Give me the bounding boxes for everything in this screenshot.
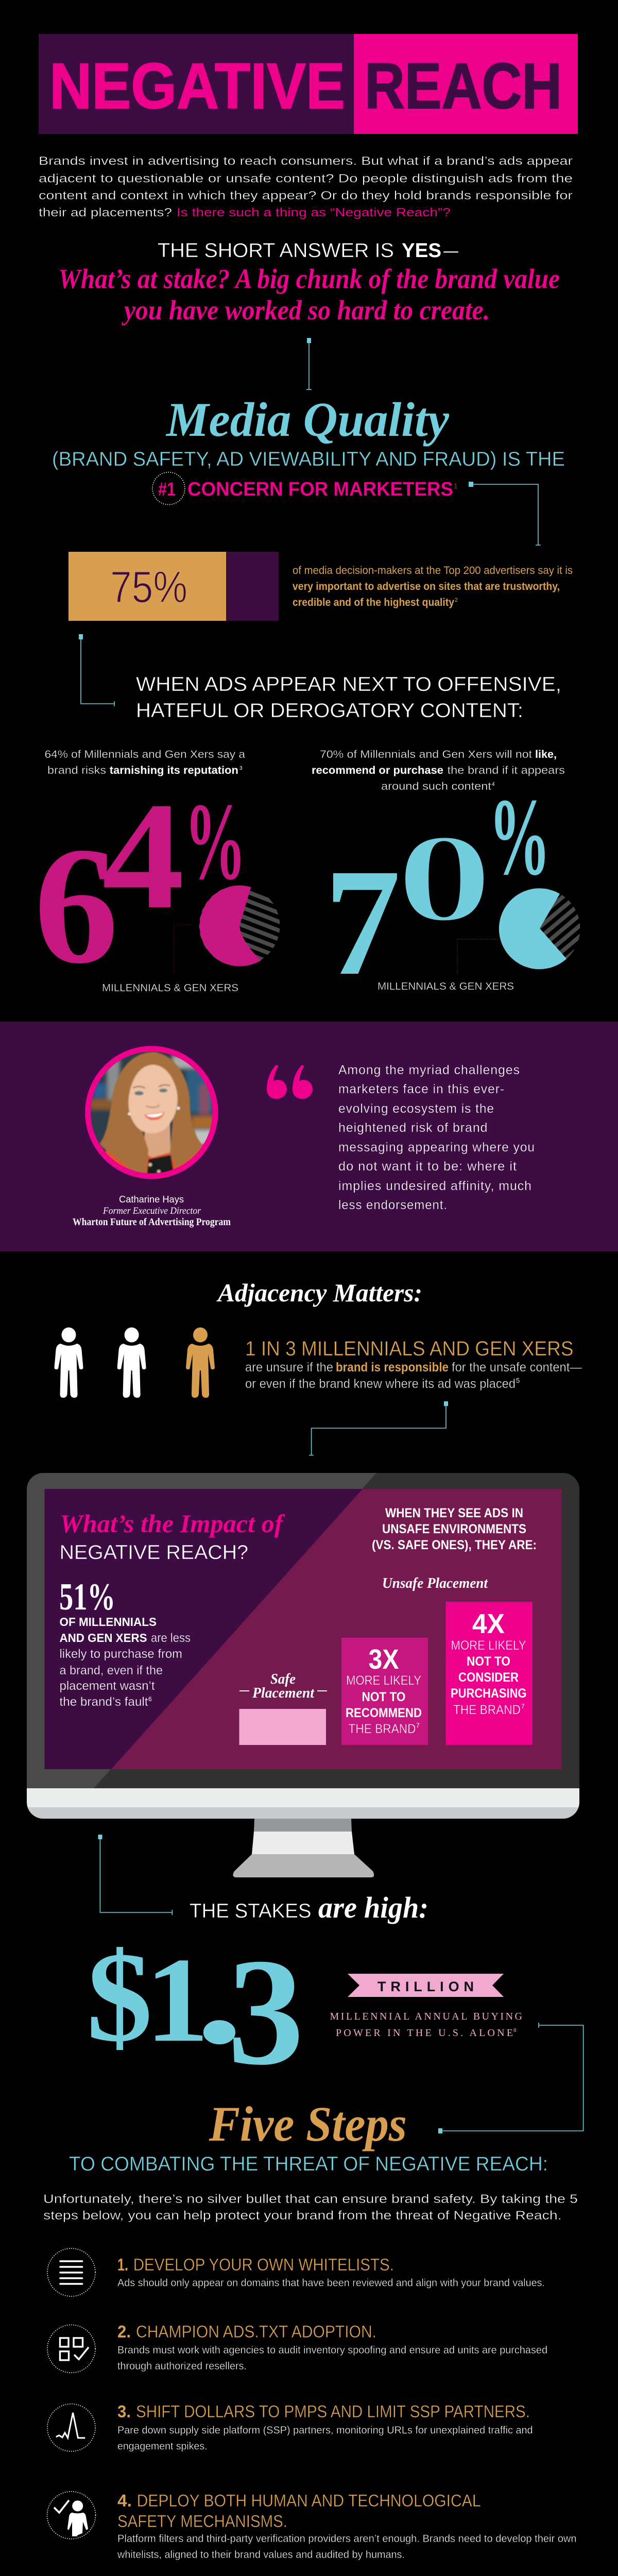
step 2: CHAMPION ADS.TXT ADOPTION.: [136, 2322, 376, 2341]
safe placement label and bar: [239, 1671, 327, 1745]
unsafe environments heading: [372, 1506, 537, 1552]
unsafe environments heading: (VS. SAFE ONES), THEY ARE:: [372, 1538, 537, 1552]
big number 64 percent: [34, 771, 246, 998]
bar 3X: NOT TO: [362, 1690, 406, 1704]
51 percent stat: placement wasn’t: [60, 1679, 155, 1693]
intro paragraph: Brands invest in advertising to reach consumers. But what if a brand’s ads appear: [39, 154, 573, 167]
quote text: [338, 1063, 535, 1212]
quote text: evolving ecosystem is the: [338, 1101, 494, 1116]
panel: quote Catharine Hays: [0, 1022, 618, 1251]
short answer heading: THE SHORT ANSWER IS: [158, 240, 394, 262]
pink stake statement: What’s at stake? A big chunk of the brand value: [58, 263, 560, 294]
bar 3X: MORE LIKELY: [346, 1673, 421, 1688]
icon: checklist: [47, 2325, 95, 2373]
quote text: do not want it to be: where it: [338, 1159, 517, 1174]
75 percent description: of media decision-makers at the Top 200 advertisers say it is: [293, 564, 573, 577]
intro paragraph: content and context in which they appear? Or do they hold brands responsible for: [39, 189, 573, 202]
buying power text: [330, 2011, 522, 2039]
number one concern: 1: [454, 482, 458, 490]
safe placement label and bar: Safe: [270, 1671, 296, 1687]
step 3: 3.: [117, 2402, 131, 2421]
offensive content heading: HATEFUL OR DEROGATORY CONTENT:: [136, 700, 523, 722]
monitor screen: [44, 1489, 561, 1769]
icon: list: [47, 2248, 95, 2296]
70 percent text: 70% of Millennials and Gen Xers will not: [320, 749, 532, 760]
number one concern: [152, 472, 458, 505]
51 percent stat: are less: [151, 1631, 191, 1645]
impact heading: What’s the Impact of: [60, 1509, 285, 1538]
51 percent stat: a brand, even if the: [60, 1664, 163, 1677]
quote mark: [267, 1065, 313, 1099]
big number 70 percent: 0: [396, 808, 493, 948]
pie chart 64 percent: [174, 885, 280, 974]
one in three text: brand is responsible: [336, 1360, 449, 1375]
icon: spike chart: [47, 2404, 95, 2451]
connector arrow 4: [309, 1401, 448, 1455]
attribution: Wharton Future of Advertising Program: [73, 1216, 231, 1228]
one in three text: [245, 1337, 582, 1391]
one in three text: for the unsafe content—: [452, 1360, 582, 1375]
connector arrow 5: [98, 1835, 172, 1915]
step 3: engagement spikes.: [117, 2441, 207, 2452]
big number 70 percent: 7: [324, 837, 401, 1007]
step 4: DEPLOY BOTH HUMAN AND TECHNOLOGICAL: [137, 2491, 481, 2510]
intro paragraph: [39, 154, 573, 219]
label millennials right: MILLENNIALS & GEN XERS: [377, 980, 514, 992]
one in three text: are unsure if the: [245, 1360, 333, 1375]
safe placement label and bar: Placement: [252, 1685, 315, 1701]
step 4: 4.: [117, 2491, 132, 2510]
five steps heading: Five Steps: [209, 2096, 407, 2151]
quote text: implies undesired affinity, much: [338, 1179, 532, 1193]
quote text: Among the myriad challenges: [338, 1063, 520, 1077]
big number 1.3: $: [87, 1926, 152, 2069]
label millennials left: MILLENNIALS & GEN XERS: [102, 982, 238, 994]
impact heading: [60, 1509, 285, 1564]
short answer heading: —: [443, 240, 458, 262]
number one concern: CONCERN FOR MARKETERS: [187, 479, 453, 500]
step 1: [47, 2248, 545, 2296]
impact heading: NEGATIVE REACH?: [60, 1541, 248, 1564]
quote text: messaging appearing where you: [338, 1140, 535, 1155]
step 3: [47, 2402, 533, 2452]
stakes heading: [190, 1891, 428, 1924]
icon: person with check: [47, 2492, 96, 2539]
quote text: heightened risk of brand: [338, 1121, 488, 1135]
connector arrow 1: [306, 338, 312, 389]
media quality heading: Media Quality: [165, 393, 449, 447]
offensive content heading: WHEN ADS APPEAR NEXT TO OFFENSIVE,: [136, 673, 561, 696]
intro paragraph: adjacent to questionable or unsafe content? Do people distinguish ads from the: [39, 172, 573, 185]
adjacency heading: Adjacency Matters:: [216, 1278, 422, 1307]
connector arrow 3: [79, 634, 114, 706]
one in three text: 5: [516, 1377, 520, 1384]
51 percent stat: AND GEN XERS: [60, 1631, 147, 1645]
51 percent stat: 51%: [59, 1576, 115, 1618]
number one concern: #1: [158, 479, 176, 500]
step 2: Brands must work with agencies to audit inventory spoofing and ensure ad units are purchased: [117, 2345, 547, 2356]
unsafe environments heading: WHEN THEY SEE ADS IN: [385, 1506, 523, 1520]
75 percent bar: [68, 552, 279, 621]
title banner: NEGATIVE: [49, 50, 345, 122]
stakes heading: THE STAKES: [190, 1900, 312, 1922]
75 percent description: credible and of the highest quality: [293, 596, 454, 608]
big number 64 percent: %: [184, 781, 246, 903]
pink stake statement: you have worked so hard to create.: [121, 295, 490, 326]
unsafe environments heading: UNSAFE ENVIRONMENTS: [382, 1522, 526, 1536]
title banner: [39, 34, 578, 134]
step 4: Platform filters and third-party verification providers aren’t enough. Brands need to develop their own: [117, 2533, 577, 2545]
big number 1.3: [87, 1909, 304, 2097]
75 percent description: 2: [455, 597, 458, 603]
big number 70 percent: %: [489, 776, 551, 898]
pink stake statement: [58, 263, 560, 326]
connector arrow 2: [469, 482, 541, 545]
big number 1.3: 1: [145, 1933, 209, 2067]
64 percent text: 64% of Millennials and Gen Xers say a: [44, 749, 245, 760]
bar 4X: 7: [521, 1703, 525, 1710]
attribution: Catharine Hays: [119, 1194, 184, 1205]
51 percent stat: the brand’s fault: [60, 1695, 148, 1709]
five steps subheading: TO COMBATING THE THREAT OF NEGATIVE REACH:: [69, 2153, 548, 2175]
icon: three people: [55, 1327, 215, 1398]
bar 4X: CONSIDER: [458, 1670, 519, 1685]
51 percent stat: likely to purchase from: [60, 1647, 182, 1661]
subheading brand safety: (BRAND SAFETY, AD VIEWABILITY AND FRAUD) IS THE: [52, 448, 565, 470]
quote text: less endorsement.: [338, 1198, 448, 1212]
bar 4X: THE BRAND: [453, 1703, 521, 1717]
64 percent text: [44, 749, 245, 776]
portrait: Catharine Hays: [85, 1046, 218, 1179]
one in three text: 1 IN 3 MILLENNIALS AND GEN XERS: [245, 1337, 574, 1360]
big number 1.3: .: [195, 1909, 244, 2075]
step 4: whitelists, aligned to their brand values and audited by humans.: [117, 2549, 405, 2561]
step 2: [47, 2322, 547, 2373]
monitor: [27, 1473, 579, 1877]
70 percent text: like,: [535, 749, 557, 760]
step 2: through authorized resellers.: [117, 2361, 247, 2372]
one in three text: or even if the brand knew where its ad was placed: [245, 1377, 516, 1391]
51 percent stat: OF MILLENNIALS: [60, 1615, 157, 1629]
stakes heading: are high:: [318, 1891, 428, 1924]
trillion ribbon: [348, 1974, 504, 1997]
attribution: [73, 1194, 231, 1228]
bar 4X: PURCHASING: [451, 1686, 526, 1701]
70 percent text: around such content: [381, 781, 491, 792]
75 percent description: [293, 564, 573, 608]
buying power text: 8: [513, 2027, 517, 2033]
64 percent text: 3: [239, 766, 243, 771]
quote text: marketers face in this ever-: [338, 1082, 505, 1096]
big number 64 percent: 4: [102, 771, 184, 941]
64 percent text: tarnishing its reputation: [110, 765, 238, 776]
bar 3X: THE BRAND: [348, 1722, 416, 1736]
step 1: Ads should only appear on domains that have been reviewed and align with your brand values.: [117, 2277, 545, 2289]
big number 1.3: 3: [228, 1927, 304, 2097]
title banner: REACH: [365, 50, 562, 122]
big number 64 percent: 6: [34, 812, 118, 998]
buying power text: POWER IN THE U.S. ALONE: [336, 2027, 513, 2039]
step 1: 1.: [117, 2255, 128, 2274]
connector arrow 6: [438, 2023, 583, 2133]
big number 70 percent: [324, 776, 551, 1007]
pie chart 70 percent: [457, 888, 580, 974]
step 2: 2.: [117, 2322, 131, 2341]
buying power text: MILLENNIAL ANNUAL BUYING: [330, 2011, 522, 2022]
intro paragraph: Is there such a thing as “Negative Reach”?: [177, 206, 451, 219]
unsafe placement label: Unsafe Placement: [382, 1575, 488, 1591]
short answer heading: YES: [402, 240, 441, 262]
bar 4X: 4X: [472, 1608, 505, 1639]
step 4: SAFETY MECHANISMS.: [117, 2512, 287, 2531]
bar 3X: RECOMMEND: [346, 1706, 422, 1720]
bar 4X: [446, 1602, 533, 1745]
bar 4X: NOT TO: [467, 1654, 510, 1669]
attribution: Former Executive Director: [102, 1206, 201, 1216]
five steps intro: [43, 2192, 578, 2223]
bar 3X: [341, 1638, 428, 1745]
bar 3X: 3X: [369, 1644, 399, 1675]
intro paragraph: their ad placements?: [39, 206, 172, 219]
trillion ribbon: TRILLION: [377, 1979, 474, 1994]
70 percent text: the brand if it appears: [448, 765, 565, 776]
51 percent stat: [59, 1576, 191, 1709]
51 percent stat: 6: [148, 1696, 152, 1703]
70 percent text: 4: [492, 782, 495, 787]
step 4: [47, 2491, 577, 2561]
75 percent bar: 75%: [110, 563, 187, 612]
bar 4X: MORE LIKELY: [451, 1638, 526, 1653]
step 1: DEVELOP YOUR OWN WHITELISTS.: [133, 2255, 394, 2274]
64 percent text: brand risks: [47, 765, 106, 776]
five steps intro: Unfortunately, there’s no silver bullet that can ensure brand safety. By taking the 5: [43, 2192, 578, 2206]
70 percent text: recommend or purchase: [312, 765, 443, 776]
five steps intro: steps below, you can help protect your brand from the threat of Negative Reach.: [43, 2209, 562, 2223]
bar 3X: 7: [416, 1722, 420, 1729]
step 3: SHIFT DOLLARS TO PMPS AND LIMIT SSP PARTNERS.: [136, 2402, 530, 2421]
step 3: Pare down supply side platform (SSP) partners, monitoring URLs for unexplained traffic and: [117, 2425, 533, 2436]
75 percent description: very important to advertise on sites that are trustworthy,: [293, 580, 560, 592]
monitor stand: [233, 1819, 374, 1877]
70 percent text: [312, 749, 565, 792]
offensive content heading: [136, 673, 561, 722]
